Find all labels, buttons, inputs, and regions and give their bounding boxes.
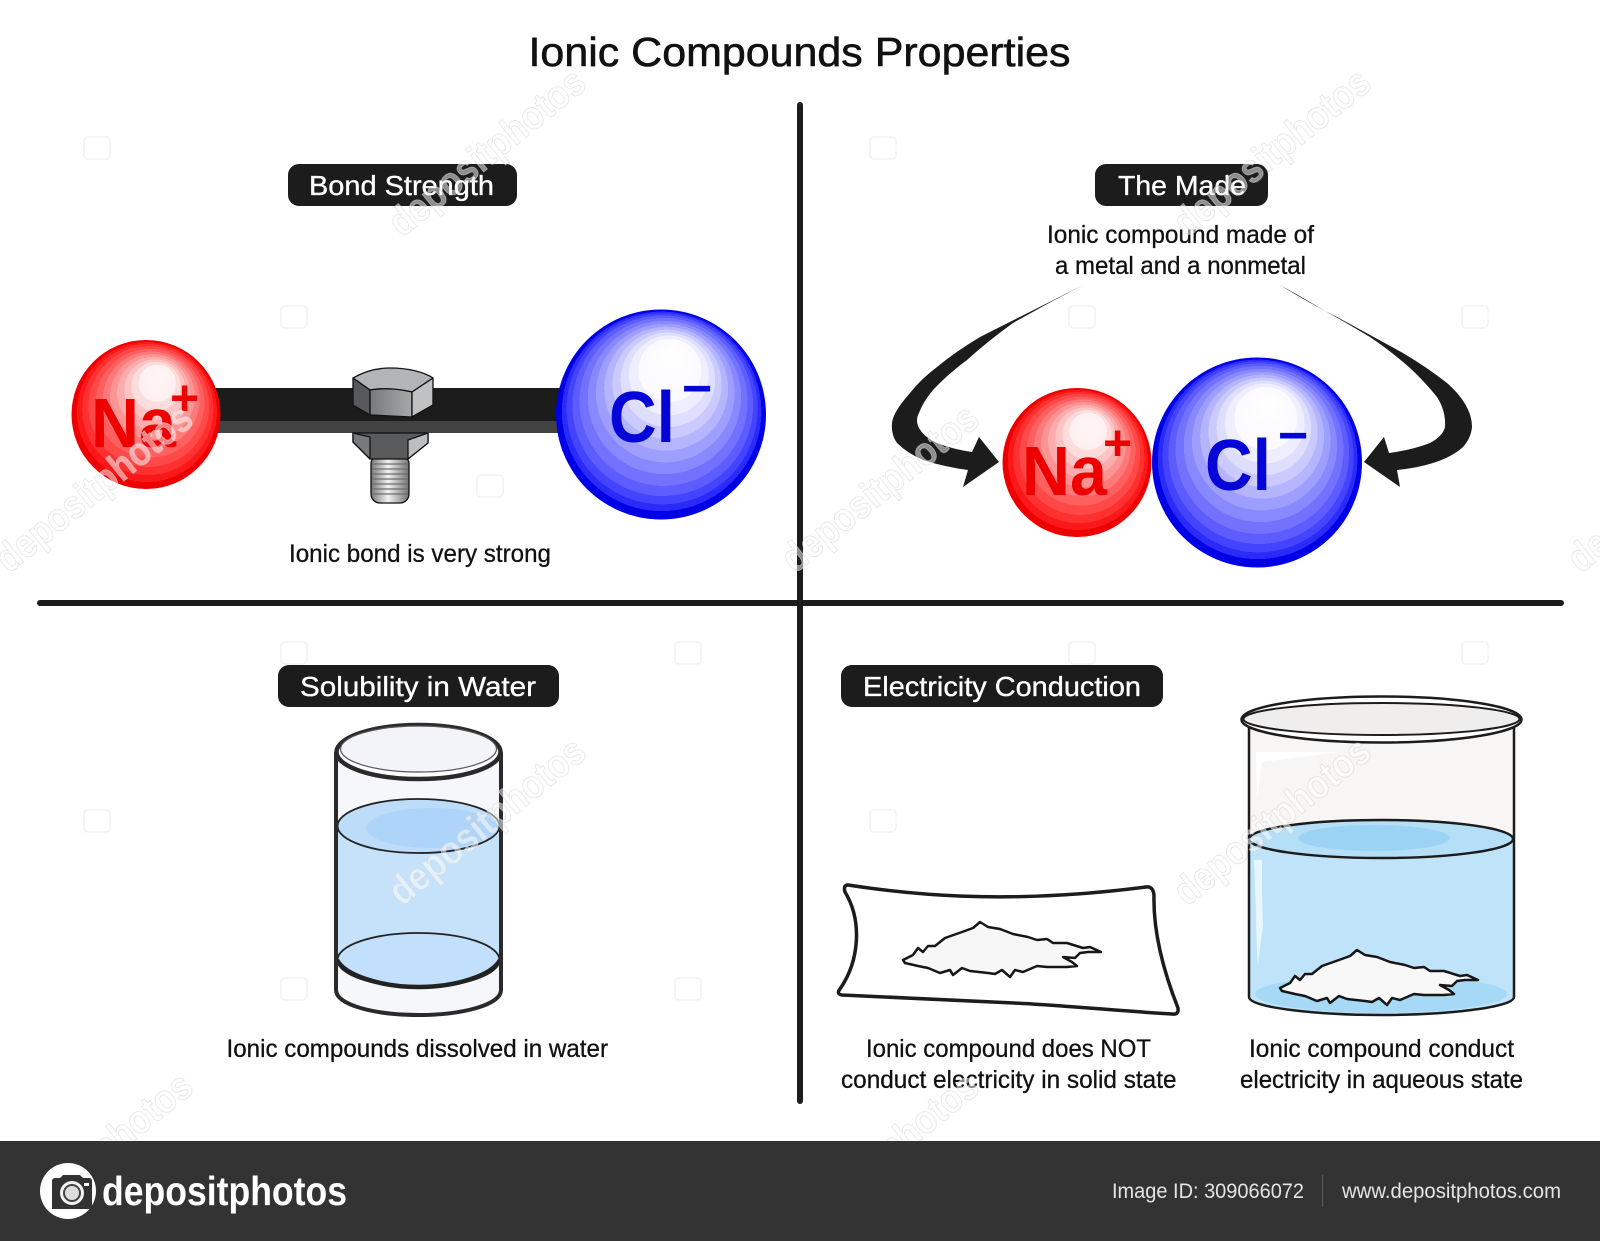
heading: electricity conduction	[841, 665, 1163, 707]
caption: the made: a metal and a nonmetal	[1055, 252, 1306, 280]
caption: the made: Ionic compound made of	[1047, 221, 1314, 249]
atom: sodium ion: Na	[91, 384, 177, 462]
icon: compound on paper	[838, 885, 1178, 1014]
icon: glass of water	[336, 725, 501, 1015]
caption: the made	[1047, 221, 1314, 280]
vertical divider	[797, 105, 803, 1101]
atom: sodium ion	[72, 340, 220, 489]
watermarks: depositphotos	[773, 396, 987, 581]
caption: aqueous state: Ionic compound conduct	[1249, 1035, 1514, 1063]
title: Ionic Compounds Properties	[528, 29, 1070, 75]
atom: chloride ion: −	[682, 360, 712, 418]
watermark: camera marks	[84, 137, 1488, 1000]
footer separator	[1322, 1175, 1324, 1207]
caption: bond strength: Ionic bond is very strong	[289, 540, 551, 568]
horizontal divider	[40, 600, 1561, 606]
atom: chloride ion: Cl	[1205, 426, 1271, 506]
icon: bolt	[353, 368, 433, 503]
atom: sodium ion	[1002, 388, 1152, 537]
heading: solubility	[278, 665, 559, 707]
arrow: left to sodium	[892, 285, 1083, 487]
icon: camera logo	[40, 1163, 96, 1219]
atom: chloride ion: Cl	[609, 378, 675, 458]
watermarks: depositphotos	[380, 729, 594, 914]
caption: solid state: conduct electricity in solid state	[841, 1066, 1176, 1094]
panel: the made	[892, 164, 1472, 568]
panel: bond strength	[72, 164, 766, 568]
panel: solubility in water	[226, 665, 608, 1063]
heading: the made: The Made	[1118, 170, 1246, 201]
watermarks: depositphotos	[1165, 729, 1379, 914]
caption: solubility: Ionic compounds dissolved in water	[226, 1035, 608, 1063]
arrow: right to chloride	[1280, 285, 1472, 487]
caption: aqueous state: electricity in aqueous state	[1240, 1066, 1523, 1094]
image id: Image ID: 309066072	[1112, 1180, 1304, 1203]
heading: bond strength	[288, 164, 517, 206]
caption: solid state	[841, 1035, 1176, 1094]
heading: solubility: Solubility in Water	[300, 671, 536, 702]
caption: solid state: Ionic compound does NOT	[866, 1035, 1151, 1063]
website: www.depositphotos.com	[1341, 1180, 1561, 1203]
atom: sodium ion: Na	[1022, 432, 1108, 510]
icon: beaker with water	[1242, 696, 1522, 1015]
bond bar	[215, 388, 560, 433]
atom: chloride ion: −	[1278, 407, 1308, 465]
atom: sodium ion: +	[170, 370, 199, 426]
heading: the made	[1095, 164, 1268, 206]
footer bar	[0, 1141, 1600, 1241]
heading: electricity conduction: Electricity Conduction	[863, 671, 1141, 702]
watermarks: depositphotos	[1165, 60, 1379, 245]
heading: bond strength: Bond Strength	[309, 170, 494, 201]
panel: electricity conduction	[838, 665, 1523, 1094]
atom: chloride ion	[1152, 358, 1362, 568]
atom: chloride ion	[556, 310, 766, 520]
atom: sodium ion: +	[1103, 415, 1132, 471]
logo wordmark: depositphotos	[102, 1168, 347, 1214]
watermarks: depositphotos	[380, 60, 594, 245]
caption: aqueous state	[1240, 1035, 1523, 1094]
